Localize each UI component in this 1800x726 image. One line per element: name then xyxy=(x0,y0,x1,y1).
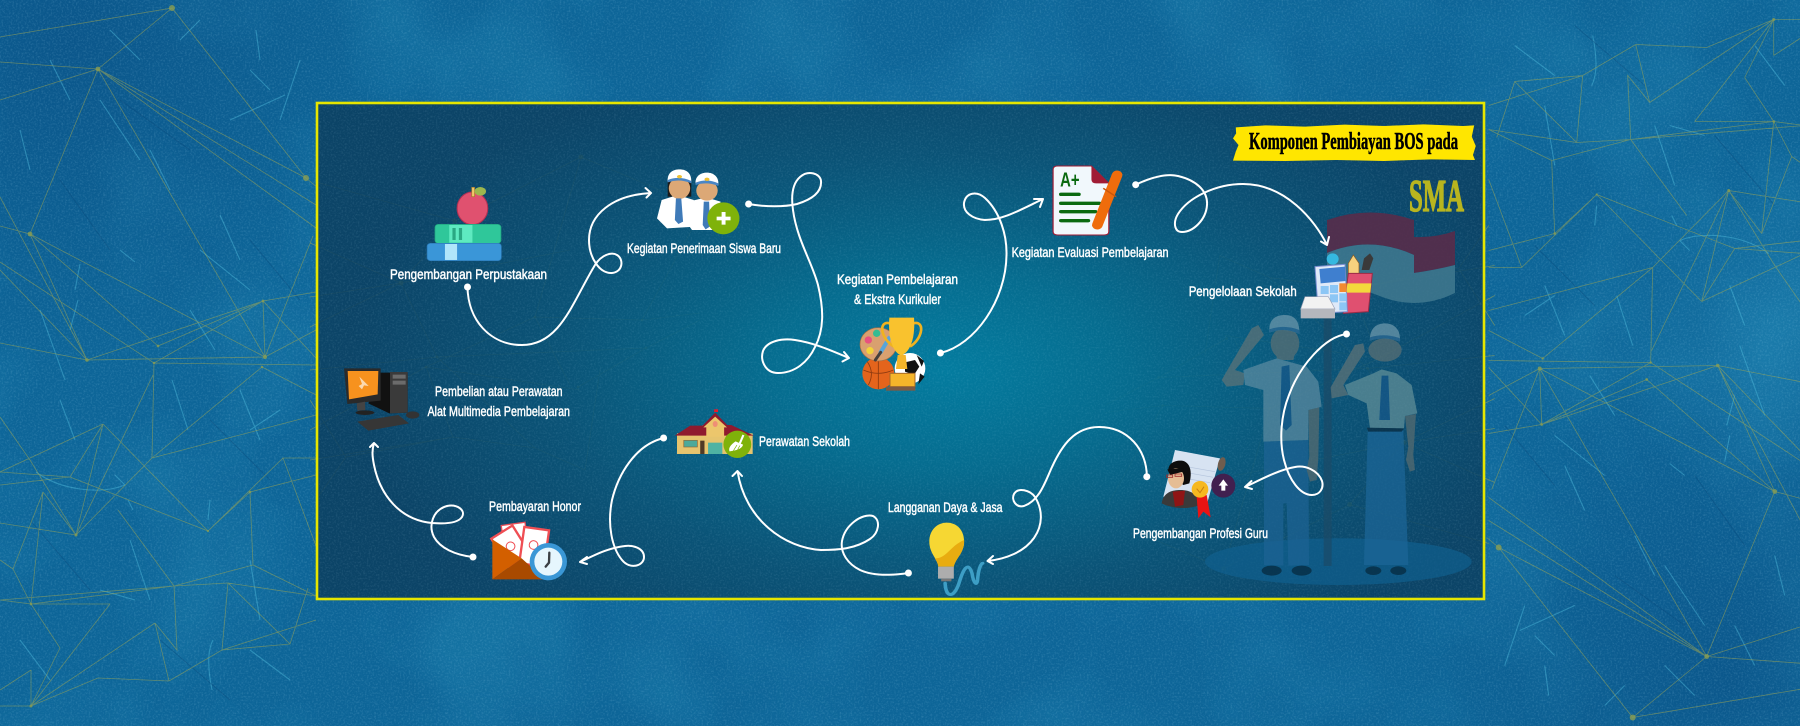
arrow: evaluasi to pengelolaan xyxy=(1132,175,1329,245)
label: kegiatan penerimaan siswa baru: Kegiatan Penerimaan Siswa Baru xyxy=(627,240,781,256)
title ribbon xyxy=(1233,124,1476,161)
label: pembelian atau perawatan alat multimedia: Alat Multimedia Pembelajaran xyxy=(428,403,570,419)
icon: school building xyxy=(675,409,754,458)
label: kegiatan pembelajaran dan ekstra kurikuler xyxy=(837,271,958,307)
arrow: honor to multimedia xyxy=(370,443,476,560)
panel: main dark teal frame xyxy=(317,103,1484,599)
title text: Komponen Pembiayan BOS pada xyxy=(1249,129,1458,155)
icon: teacher with certificate xyxy=(1162,450,1235,518)
heading: SMA: SMA xyxy=(1409,170,1464,221)
icon: art, trophy and balls xyxy=(860,318,925,391)
icon: computer xyxy=(344,368,419,431)
label: langganan daya dan jasa: Langganan Daya & Jasa xyxy=(888,499,1003,515)
label: pembayaran honor: Pembayaran Honor xyxy=(489,498,581,514)
label: perawatan sekolah: Perawatan Sekolah xyxy=(759,433,850,449)
flag xyxy=(1327,212,1455,303)
arrow: langganan to perawatan sekolah xyxy=(732,471,912,576)
label: kegiatan pembelajaran dan ekstra kurikuler: Kegiatan Pembelajaran xyxy=(837,271,958,287)
icon: exam paper xyxy=(1053,166,1117,235)
arrow: pembelajaran to evaluasi xyxy=(937,194,1043,356)
arrow: siswa baru to pembelajaran xyxy=(745,173,849,373)
illustration: flag and saluting students xyxy=(1205,212,1472,585)
label: kegiatan evaluasi pembelajaran: Kegiatan Evaluasi Pembelajaran xyxy=(1012,244,1169,260)
icon: students with plus xyxy=(657,169,739,234)
label: pembelian atau perawatan alat multimedia: Pembelian atau Perawatan xyxy=(435,383,562,399)
arrow: pengelolaan to profesi guru xyxy=(1245,330,1350,495)
icon: calculator and stationery xyxy=(1301,253,1373,318)
label: pengembangan perpustakaan: Pengembangan Perpustakaan xyxy=(390,266,547,282)
icon: books and apple xyxy=(427,187,501,261)
arrow: perpustakaan to siswa baru xyxy=(464,188,651,345)
icon: light bulb xyxy=(929,523,983,595)
icon: exam paper: A+ xyxy=(1060,168,1080,191)
label: pembelian atau perawatan alat multimedia xyxy=(428,383,570,419)
label: pengembangan profesi guru: Pengembangan Profesi Guru xyxy=(1133,525,1268,541)
icon: money envelope and clock xyxy=(491,522,567,580)
label: kegiatan pembelajaran dan ekstra kurikuler: & Ekstra Kurikuler xyxy=(854,291,941,307)
arrow: profesi guru to langganan xyxy=(988,427,1150,564)
label: pengelolaan sekolah: Pengelolaan Sekolah xyxy=(1189,283,1297,299)
students silhouette xyxy=(1205,315,1472,585)
arrow: perawatan sekolah to honor xyxy=(580,434,667,566)
